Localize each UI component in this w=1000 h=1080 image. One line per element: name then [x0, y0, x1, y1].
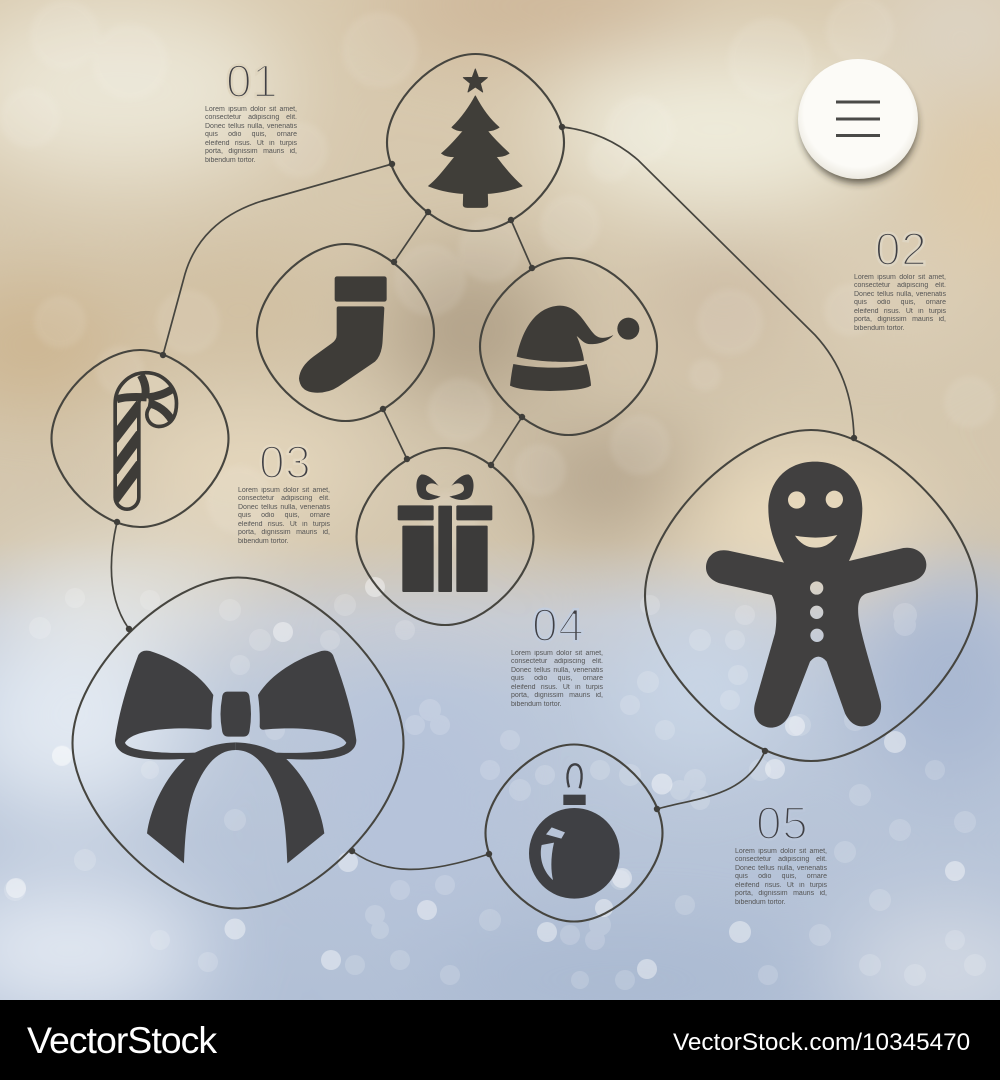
icon nodes — [50, 53, 978, 922]
paragraph 01: consectetur adipiscing elit. — [205, 114, 297, 121]
icon: candy cane — [113, 375, 173, 501]
paragraph 03: Donec tellus nulla, venenatis — [238, 504, 330, 511]
icon: gingerbread man — [706, 462, 926, 728]
paragraph 03: quis odio quis, ornare — [238, 512, 330, 519]
paragraph 03: Lorem ipsum dolor sit amet, — [238, 487, 330, 494]
watermark url: VectorStock.com/10345470 — [673, 1029, 970, 1056]
paragraph 04 — [511, 650, 603, 708]
paragraph 01: Donec tellus nulla, venenatis — [205, 123, 297, 130]
node: bauble — [486, 744, 662, 922]
paragraph 01: Lorem ipsum dolor sit amet, — [205, 106, 297, 113]
icon: stocking — [299, 276, 387, 393]
paragraph 04: eleifend risus. Ut in turpis — [511, 684, 603, 691]
paragraph 05 — [735, 848, 827, 906]
node: gingerbread man — [645, 430, 977, 761]
icon: tree with star — [429, 69, 522, 207]
paragraph 02: Donec tellus nulla, venenatis — [854, 291, 946, 298]
menu button — [798, 59, 918, 183]
paragraph 04: Lorem ipsum dolor sit amet, — [511, 650, 603, 657]
paragraph 02 — [854, 274, 946, 332]
text block 01 — [205, 55, 297, 164]
paragraph 05: quis odio quis, ornare — [735, 873, 827, 880]
paragraph 03: consectetur adipiscing elit. — [238, 495, 330, 502]
text block 04 — [511, 599, 603, 708]
icon: ribbon bow — [115, 651, 356, 863]
number 05: 05 — [756, 797, 808, 849]
icon: santa hat — [510, 306, 639, 391]
paragraph 02: quis odio quis, ornare — [854, 299, 946, 306]
paragraph 05: consectetur adipiscing elit. — [735, 856, 827, 863]
paragraph 02: porta, dignissim mauris id, — [854, 316, 946, 323]
icon: hamburger menu — [836, 100, 880, 137]
node: christmas tree — [387, 54, 564, 231]
paragraph 04: Donec tellus nulla, venenatis — [511, 667, 603, 674]
node: stocking — [257, 244, 434, 421]
paragraph 04: consectetur adipiscing elit. — [511, 658, 603, 665]
paragraph 03: bibendum tortor. — [238, 538, 289, 545]
connection nodes — [114, 124, 857, 857]
paragraph 01 — [205, 106, 297, 164]
paragraph 04: porta, dignissim mauris id, — [511, 692, 603, 699]
number 03: 03 — [259, 436, 311, 488]
paragraph 01: porta, dignissim mauris id, — [205, 148, 297, 155]
paragraph 05: Lorem ipsum dolor sit amet, — [735, 848, 827, 855]
paragraph 01: quis odio quis, ornare — [205, 131, 297, 138]
text block 02 — [854, 223, 946, 332]
node: gift box — [356, 448, 534, 625]
paragraph 03: porta, dignissim mauris id, — [238, 529, 330, 536]
paragraph 03 — [238, 487, 330, 545]
number 04: 04 — [532, 599, 584, 651]
paragraph 05: porta, dignissim mauris id, — [735, 890, 827, 897]
paragraph 01: bibendum tortor. — [205, 157, 256, 164]
paragraph 05: eleifend risus. Ut in turpis — [735, 882, 827, 889]
icon: christmas bauble — [529, 764, 620, 899]
text block 05 — [735, 797, 827, 906]
paragraph 02: bibendum tortor. — [854, 325, 905, 332]
node: candy cane — [52, 350, 228, 527]
paragraph 05: Donec tellus nulla, venenatis — [735, 865, 827, 872]
paragraph 05: bibendum tortor. — [735, 899, 786, 906]
watermark logo: VectorStock — [27, 1019, 216, 1061]
paragraph 02: eleifend risus. Ut in turpis — [854, 308, 946, 315]
node: bow — [72, 578, 404, 908]
paragraph 03: eleifend risus. Ut in turpis — [238, 521, 330, 528]
paragraph 02: consectetur adipiscing elit. — [854, 282, 946, 289]
number 01: 01 — [226, 55, 278, 107]
text block 03 — [238, 436, 330, 545]
paragraph 04: bibendum tortor. — [511, 701, 562, 708]
number 02: 02 — [875, 223, 927, 275]
icon: gift box — [398, 474, 492, 592]
paragraph 02: Lorem ipsum dolor sit amet, — [854, 274, 946, 281]
paragraph 04: quis odio quis, ornare — [511, 675, 603, 682]
node: santa hat — [480, 258, 657, 435]
paragraph 01: eleifend risus. Ut in turpis — [205, 140, 297, 147]
